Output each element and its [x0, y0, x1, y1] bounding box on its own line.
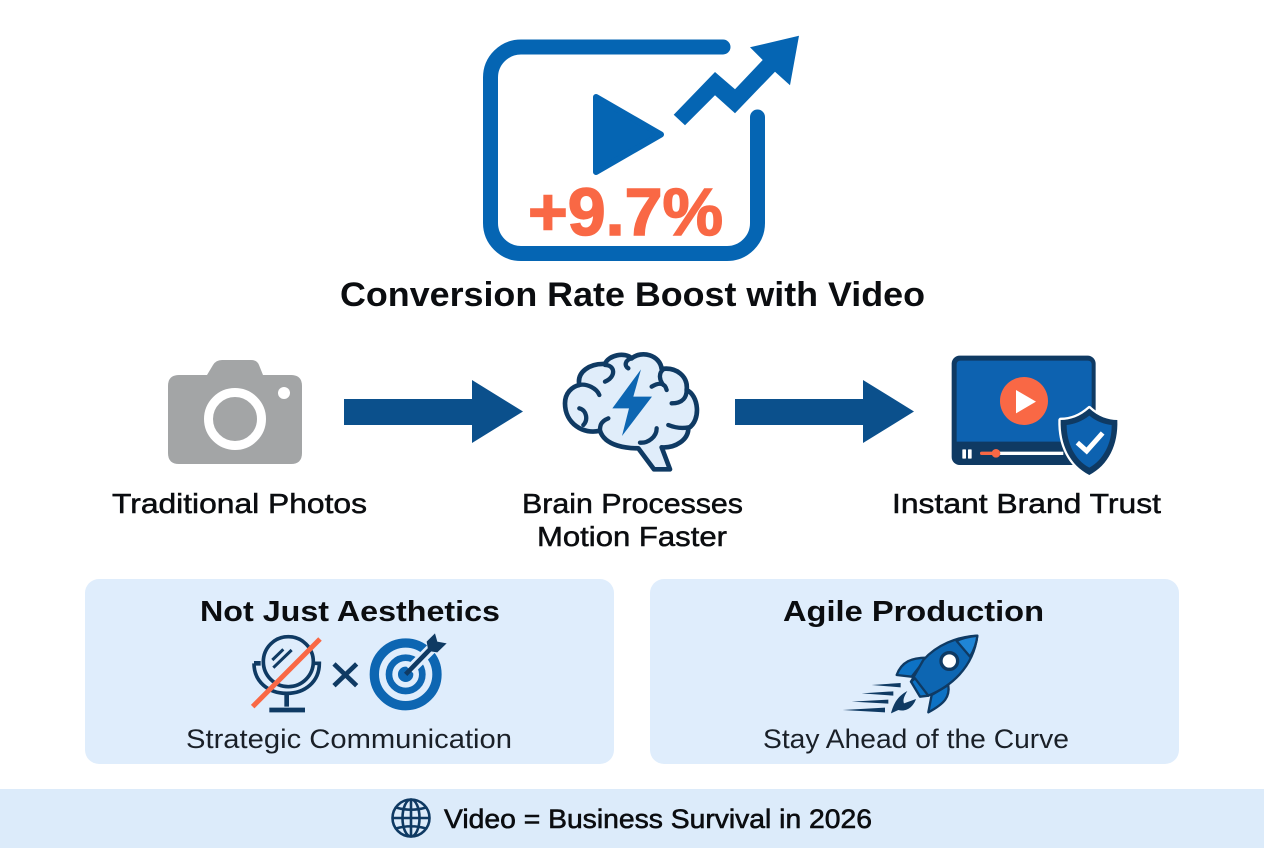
icons: mirror crossed out, times, target: [253, 633, 447, 710]
growth arrow: [674, 36, 799, 125]
label: Instant Brand Trust: Instant Brand Trust: [892, 488, 1161, 519]
label: Brain Processes Motion Faster: Motion Faster: [537, 521, 727, 552]
panel: Agile Production: [650, 579, 1179, 764]
icon: brain with lightning bolt: [565, 354, 697, 469]
stat: +9.7%: +9.7%: [528, 175, 723, 250]
play triangle: [596, 97, 661, 172]
icon: rocket: [843, 636, 977, 713]
panel caption: Strategic Communication: [186, 724, 512, 754]
footer text: Video = Business Survival in 2026: [444, 804, 872, 834]
video frame outline: [490, 47, 758, 254]
icon: camera: [168, 360, 302, 464]
label: Traditional Photos: Traditional Photos: [112, 488, 367, 519]
icon: globe: [392, 800, 430, 836]
panel caption: Stay Ahead of the Curve: [763, 724, 1069, 754]
label: Brain Processes Motion Faster: [522, 488, 743, 552]
panel heading: Not Just Aesthetics: [200, 596, 500, 628]
panel heading: Agile Production: [783, 596, 1044, 628]
label: Brain Processes Motion Faster: Brain Processes: [522, 488, 743, 519]
icon: video player with shield: [952, 356, 1117, 475]
footer banner: [0, 789, 1264, 848]
arrow: brain to trust: [735, 380, 914, 443]
arrow: photos to brain: [344, 380, 523, 443]
hero icon: video frame with growth arrow: [490, 36, 799, 254]
panel: Not Just Aesthetics: [85, 579, 614, 764]
title: Conversion Rate Boost with Video: [340, 276, 925, 314]
